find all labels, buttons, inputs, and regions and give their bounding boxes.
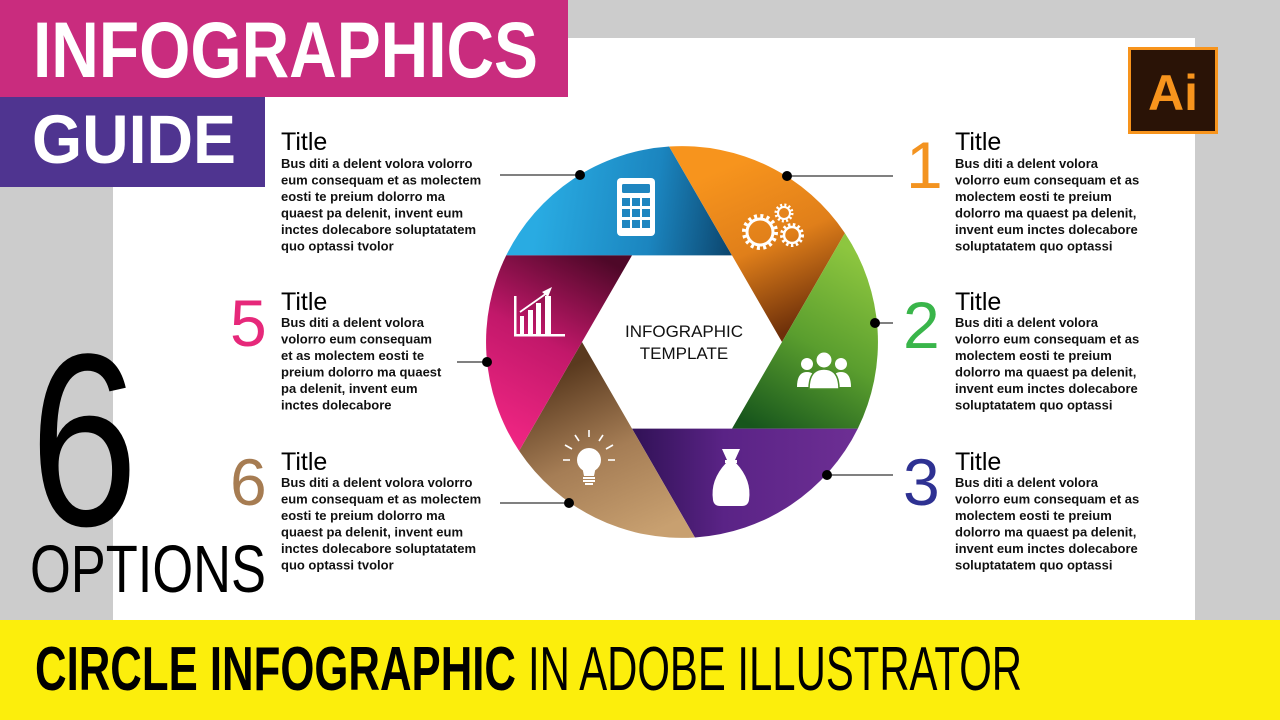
text block: 3: dolorro ma quaest pa delenit, xyxy=(955,524,1136,540)
text block: 2: molectem eosti te preium xyxy=(955,348,1112,363)
text block: 2: volorro eum consequam et as xyxy=(955,332,1139,346)
text block: 1 xyxy=(906,128,1139,254)
bottom banner: CIRCLE INFOGRAPHIC xyxy=(35,635,516,704)
text block: 1: soluptatatem quo optassi xyxy=(955,238,1112,254)
icon: calculator xyxy=(617,178,655,236)
Ai logo xyxy=(1130,48,1216,132)
Ai logo: Ai xyxy=(1148,65,1198,121)
text block: 4 (top left): quo optassi tvolor xyxy=(281,238,394,254)
text block: 1: 1 xyxy=(906,128,943,202)
text block: 5: 5 xyxy=(230,286,267,360)
text block: 6: quo optassi tvolor xyxy=(281,558,394,572)
text block: 4 (top left): Title xyxy=(281,128,327,156)
segment: green people xyxy=(732,233,878,429)
segment: blue calculator xyxy=(506,146,732,255)
text block: 2: 2 xyxy=(903,288,940,362)
banner: GUIDE: GUIDE xyxy=(32,101,236,178)
text block: 6: inctes dolecabore soluptatatem xyxy=(281,541,476,556)
text block: 4 (top left): eum consequam et as molectem xyxy=(281,172,481,188)
text block: 4 (top left): inctes dolecabore soluptatatem xyxy=(281,222,476,237)
connectors xyxy=(457,170,893,508)
bottom banner: IN ADOBE ILLUSTRATOR xyxy=(528,635,1022,704)
text block: 1: Bus diti a delent volora xyxy=(955,156,1099,171)
segment: purple bag xyxy=(632,429,858,538)
segment: orange gears xyxy=(669,146,845,342)
text block: 6 xyxy=(230,445,481,572)
big number 6: 6 xyxy=(30,303,138,578)
text block: 6: quaest pa delenit, invent eum xyxy=(281,524,463,540)
text block: 5: inctes dolecabore xyxy=(281,398,392,412)
text block: 6: eum consequam et as molectem xyxy=(281,492,481,506)
text block: 6: 6 xyxy=(230,445,267,519)
banner: INFOGRAPHICS: INFOGRAPHICS xyxy=(33,5,538,94)
icon: gears xyxy=(744,205,802,248)
text block: 1: volorro eum consequam et as xyxy=(955,172,1139,188)
OPTIONS label: OPTIONS xyxy=(30,532,266,607)
segment: pink chart xyxy=(486,255,632,451)
text block: 3: molectem eosti te preium xyxy=(955,508,1112,523)
text block: 1: molectem eosti te preium xyxy=(955,189,1112,204)
text block: 5: volorro eum consequam xyxy=(281,332,432,346)
text block: 3: Title xyxy=(955,448,1001,476)
text block: 2: Title xyxy=(955,288,1001,316)
text block: 3: soluptatatem quo optassi xyxy=(955,558,1112,572)
text block: 3 xyxy=(903,445,1139,572)
text block: 3: Bus diti a delent volora xyxy=(955,475,1099,490)
text block: 2 xyxy=(903,288,1139,412)
text block: 3: 3 xyxy=(903,445,940,519)
text block: 4 (top left) xyxy=(281,128,481,254)
text block: 3: invent eum inctes dolecabore xyxy=(955,541,1138,556)
icon: money bag xyxy=(713,449,749,506)
text block: 1: Title xyxy=(955,128,1001,156)
text block: 5: preium dolorro ma quaest xyxy=(281,364,442,380)
text block: 6: Title xyxy=(281,448,327,476)
segment: brown bulb xyxy=(519,342,695,538)
icon: growth chart xyxy=(514,287,565,336)
text block: 3: volorro eum consequam et as xyxy=(955,492,1139,506)
text block: 5: Bus diti a delent volora xyxy=(281,315,425,330)
text block: 4 (top left): quaest pa delenit, invent eum xyxy=(281,206,463,220)
text block: 2: soluptatatem quo optassi xyxy=(955,398,1112,412)
icon: light bulb xyxy=(563,430,615,485)
text block: 4 (top left): eosti te preium dolorro ma xyxy=(281,189,446,204)
text block: 1: dolorro ma quaest pa delenit, xyxy=(955,206,1136,220)
text block: 5 xyxy=(230,286,442,412)
center text: INFOGRAPHIC xyxy=(625,322,743,341)
text block: 2: invent eum inctes dolecabore xyxy=(955,381,1138,396)
text block: 4 (top left): Bus diti a delent volora volorro xyxy=(281,156,472,171)
text block: 5: Title xyxy=(281,288,327,316)
text block: 6: eosti te preium dolorro ma xyxy=(281,508,446,523)
text block: 5: pa delenit, invent eum xyxy=(281,381,418,396)
center text xyxy=(625,322,743,363)
text block: 5: et as molectem eosti te xyxy=(281,348,424,363)
icon: people xyxy=(797,352,851,389)
text block: 2: Bus diti a delent volora xyxy=(955,315,1099,330)
text block: 6: Bus diti a delent volora volorro xyxy=(281,475,472,490)
bottom banner xyxy=(0,620,1280,720)
circle infographic xyxy=(486,146,878,538)
center text: TEMPLATE xyxy=(640,344,728,363)
white page xyxy=(113,38,1195,620)
text block: 1: invent eum inctes dolecabore xyxy=(955,222,1138,237)
text block: 2: dolorro ma quaest pa delenit, xyxy=(955,364,1136,380)
